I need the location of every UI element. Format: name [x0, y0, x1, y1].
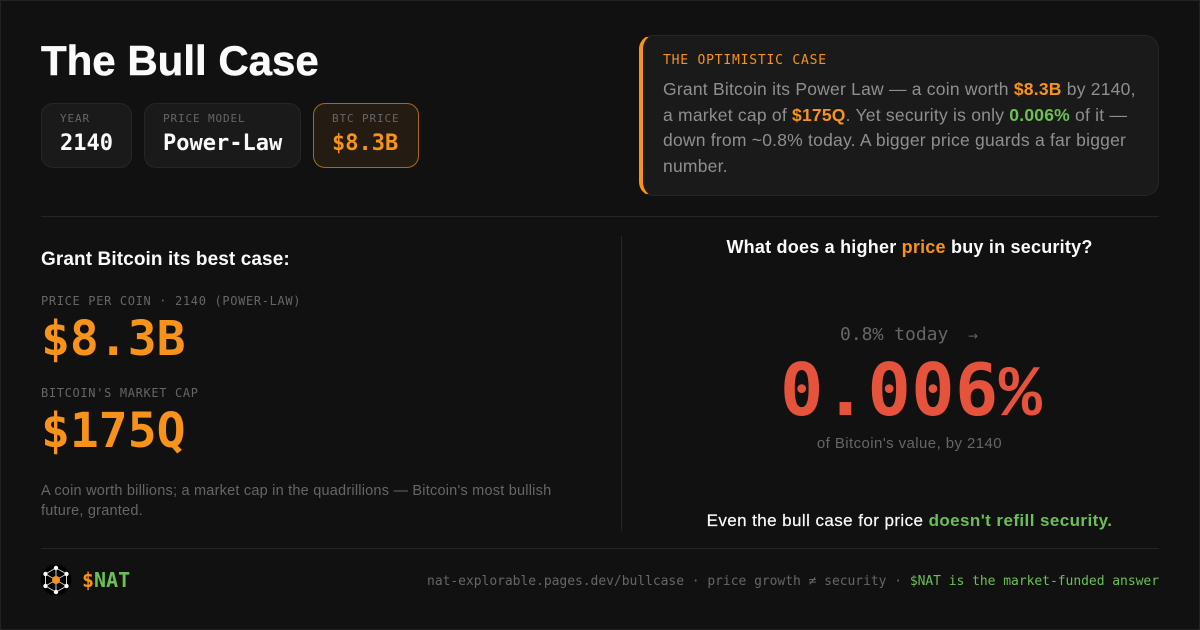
chip: btc price: BTC PRICE	[332, 112, 400, 125]
panel body text: Grant Bitcoin its Power Law — a coin worth $8.3B by 2140,	[663, 79, 1136, 99]
chip: btc price	[313, 103, 419, 168]
panel body text	[663, 79, 1136, 176]
stat: price per coin: $8.3B	[41, 311, 186, 367]
chip: price model	[144, 103, 301, 168]
icon: nat logo	[40, 564, 72, 596]
arrow: →	[968, 329, 978, 343]
right heading: What does a higher price buy in security?	[726, 237, 1093, 257]
stat caption: of Bitcoin's value, by 2140	[817, 435, 1002, 452]
chip: price model: Power-Law	[163, 131, 282, 156]
label: market cap: BITCOIN'S MARKET CAP	[41, 386, 199, 400]
panel body text: a market cap of $175Q. Yet security is only 0.006% of it —	[663, 105, 1127, 125]
conclusion: Even the bull case for price doesn't refill security.	[707, 511, 1112, 530]
panel body text: number.	[663, 156, 728, 176]
chip: year: YEAR	[60, 112, 90, 125]
chip: price model: PRICE MODEL	[163, 112, 246, 125]
brand name: $NAT	[82, 568, 130, 592]
stat: market cap: $175Q	[41, 403, 186, 459]
vertical divider	[621, 236, 622, 531]
left heading: Grant Bitcoin its best case:	[41, 249, 290, 270]
chip: btc price: $8.3B	[332, 131, 398, 156]
left caption	[41, 483, 551, 519]
left caption: future, granted.	[41, 503, 143, 519]
title: The Bull Case	[41, 37, 319, 84]
label: price per coin: PRICE PER COIN · 2140 (POWER-LAW)	[41, 294, 301, 308]
chip: year	[41, 103, 132, 168]
stat: security share: 0.006%	[780, 348, 1042, 437]
panel: the optimistic case	[639, 35, 1159, 196]
footer text: nat-explorable.pages.dev/bullcase · price growth ≠ security · $NAT is the market-funded answer	[427, 574, 1159, 589]
chip: year: 2140	[60, 131, 113, 156]
panel heading: THE OPTIMISTIC CASE	[663, 53, 827, 68]
panel body text: down from ~0.8% today. A bigger price guards a far bigger	[663, 130, 1126, 150]
footer divider	[41, 548, 1159, 549]
today comparison: 0.8% today	[840, 324, 948, 346]
divider	[41, 216, 1159, 217]
left caption: A coin worth billions; a market cap in the quadrillions — Bitcoin's most bullish	[41, 483, 551, 499]
